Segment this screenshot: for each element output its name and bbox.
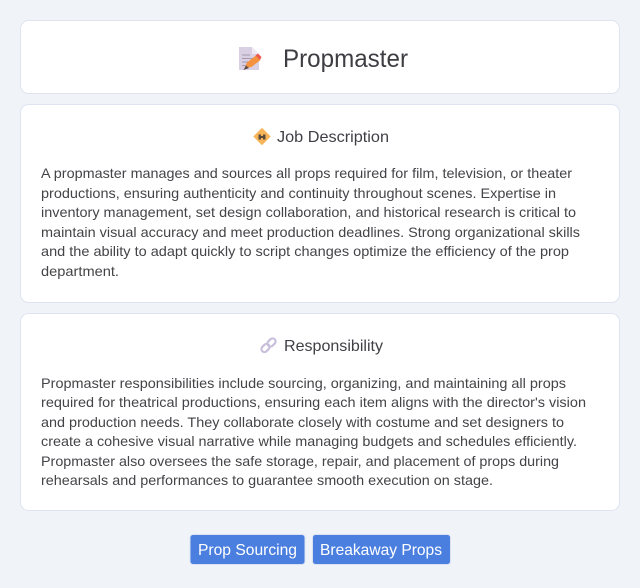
panel: title card: [20, 20, 620, 94]
icon: chain link: [260, 337, 277, 353]
text block: job description: maintain visual accuracy and meet production deadlines. Strong organizational skills: [41, 224, 580, 240]
tag: prop sourcing: Prop Sourcing: [198, 542, 297, 559]
text block: responsibility: and production needs. They collaborate closely with costume and set designers to: [41, 414, 564, 430]
text block: job description: and the ability to adapt quickly to script changes optimize the efficiency of the prop: [41, 243, 569, 259]
text block: responsibility: [41, 375, 586, 488]
text block: responsibility: Propmaster also oversees the safe storage, repair, and placement of props during: [41, 453, 559, 469]
icon: orange diamond: [254, 128, 270, 144]
title: Propmaster: [283, 45, 408, 73]
panel: job description: [20, 104, 620, 302]
panel: responsibility: [20, 314, 620, 510]
text block: job description: inventory management, set design collaboration, and historical research is critical to: [41, 204, 576, 220]
icon: document with pencil: [239, 47, 262, 70]
heading: responsibility: Responsibility: [284, 338, 383, 355]
text block: responsibility: required for theatrical productions, ensuring each item aligns with the director's vision: [41, 394, 586, 410]
text block: job description: [41, 165, 580, 279]
text block: job description: A propmaster manages and sources all props required for film, television, or theater: [41, 165, 572, 181]
text block: responsibility: Propmaster responsibilities include sourcing, organizing, and maintaining all props: [41, 375, 566, 391]
text block: responsibility: create a cohesive visual narrative while managing budgets and schedules efficiently.: [41, 433, 577, 449]
heading: job description: Job Description: [277, 129, 389, 146]
tag: breakaway props: [312, 534, 450, 564]
tag: breakaway props: Breakaway Props: [320, 542, 442, 559]
text block: job description: department.: [41, 263, 119, 279]
tag: prop sourcing: [190, 534, 305, 564]
text block: responsibility: rehearsals and performances to guarantee smooth execution on stage.: [41, 472, 493, 488]
text block: job description: productions, ensuring authenticity and continuity throughout scenes. Expertise in: [41, 185, 556, 201]
